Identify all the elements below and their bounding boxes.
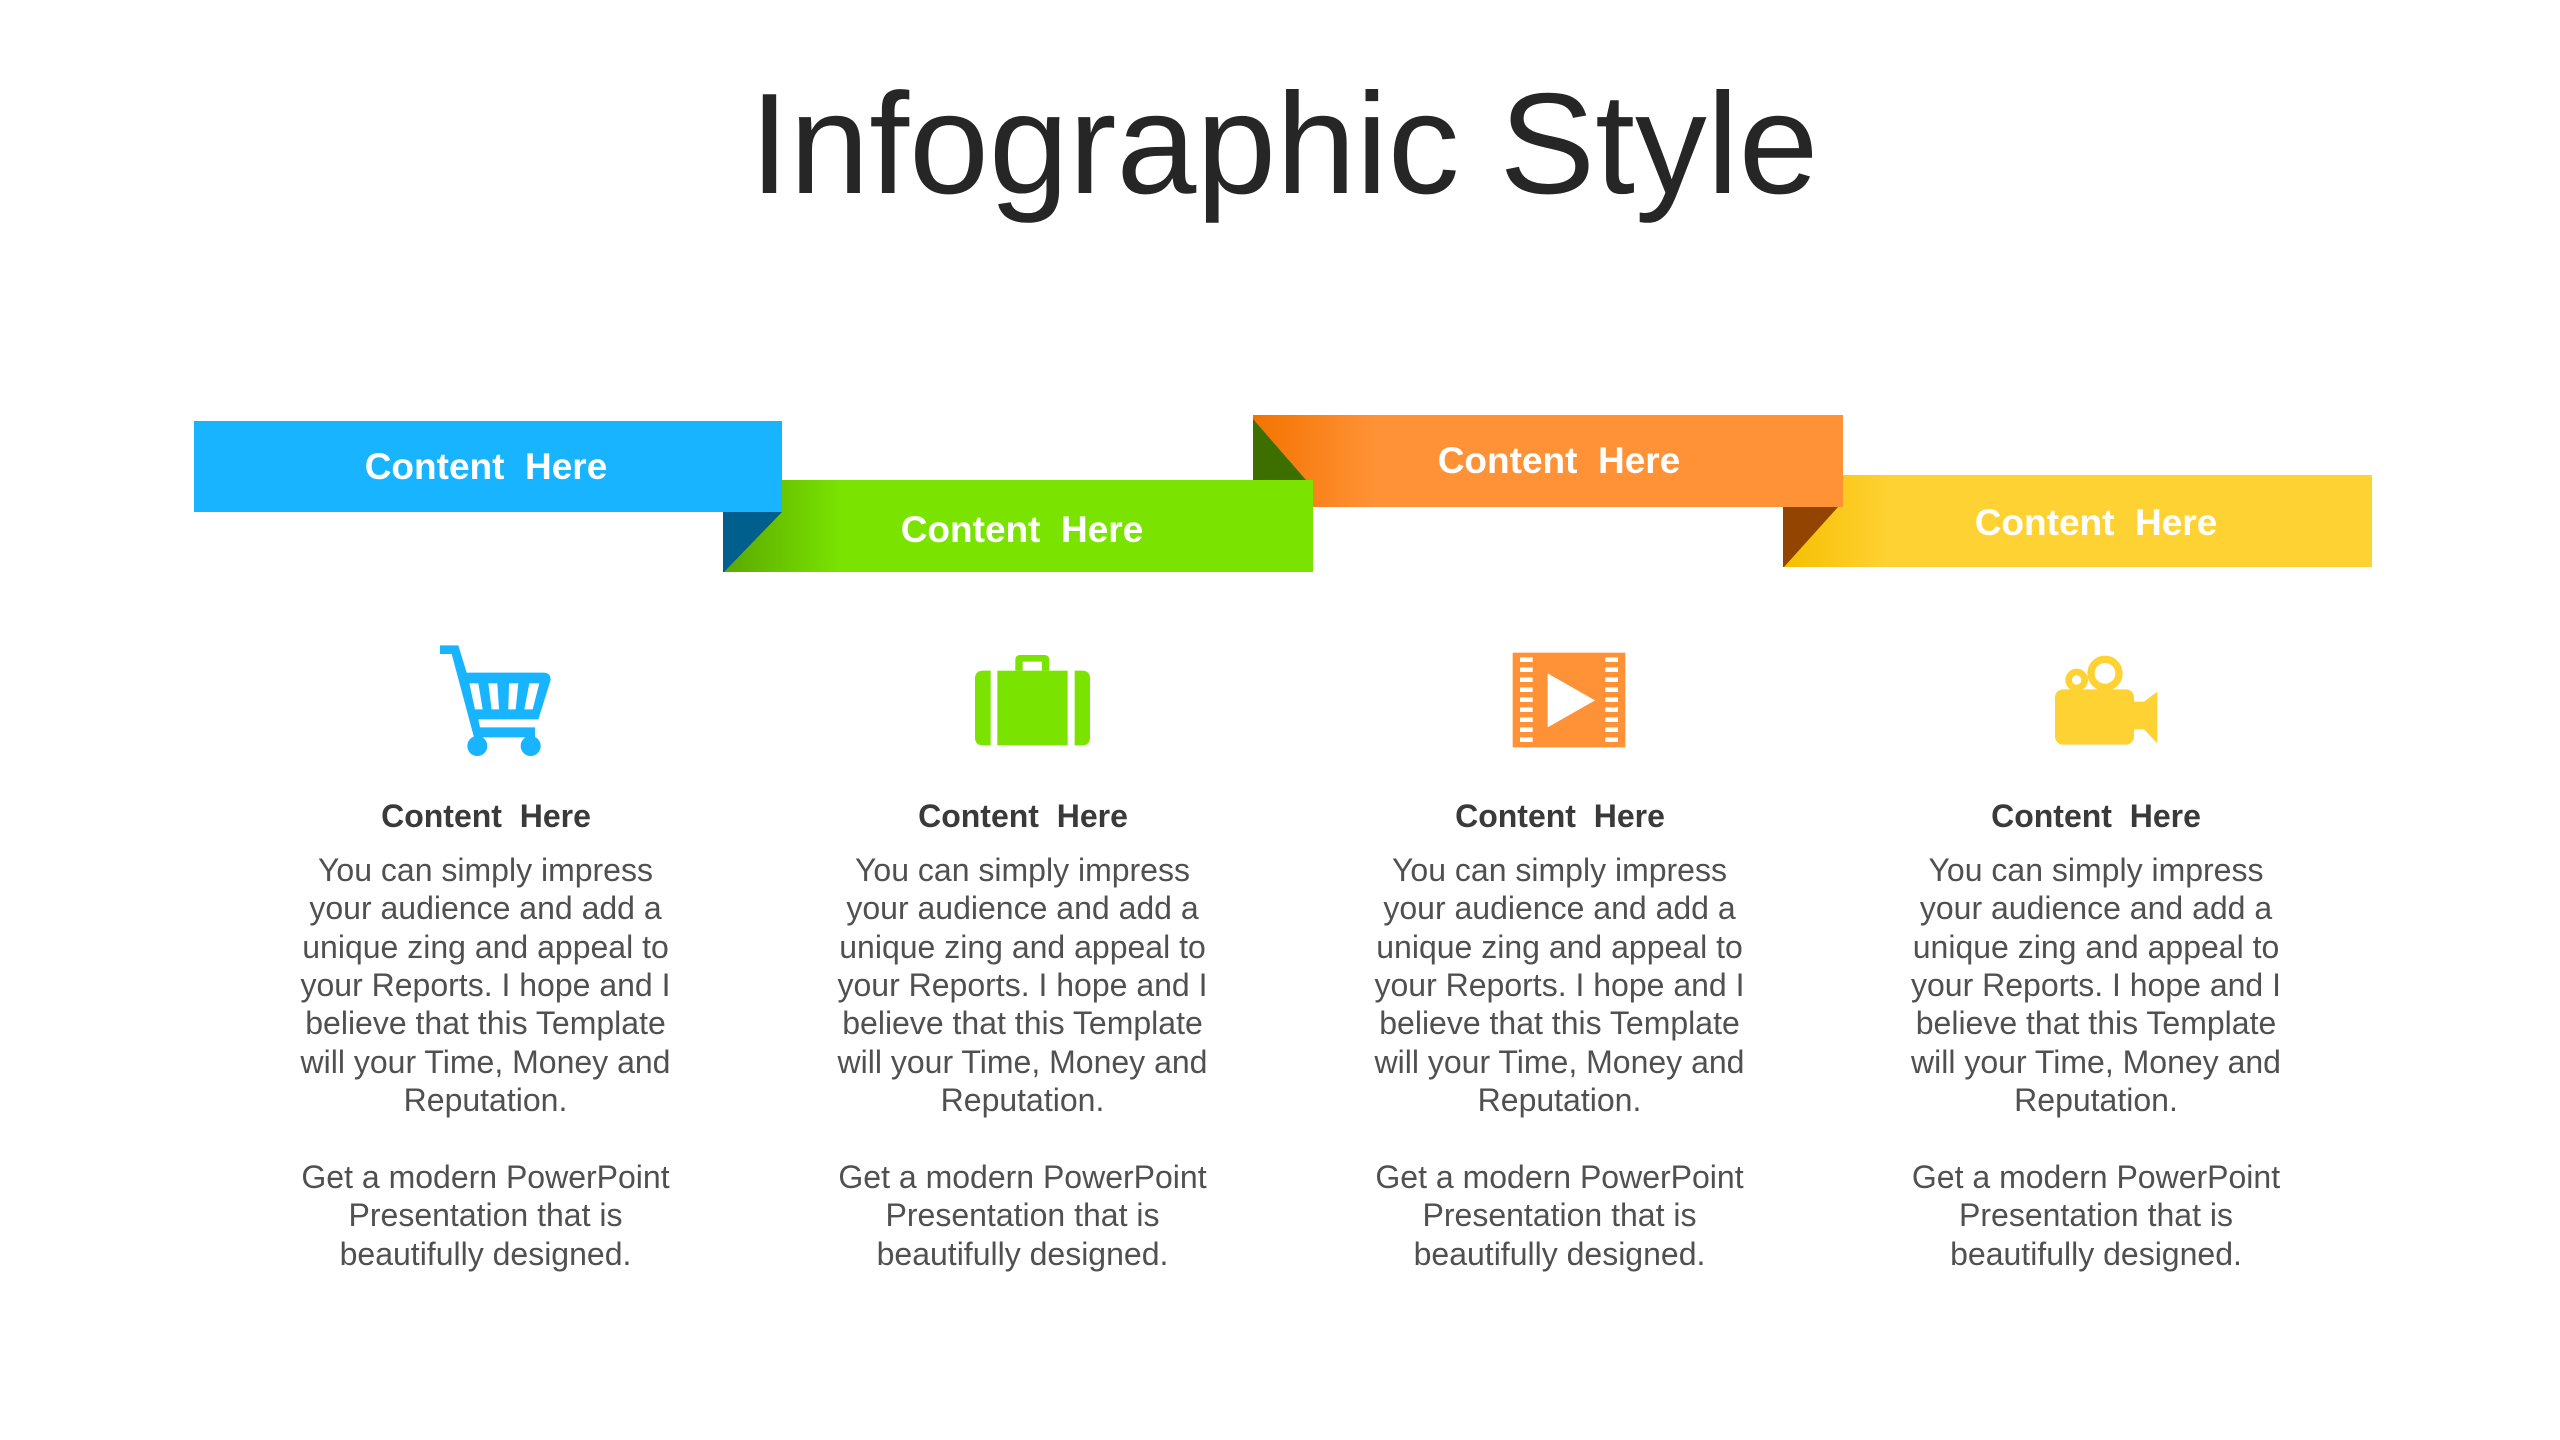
- column 1 body: your Reports. I hope and I: [300, 967, 670, 1003]
- column 4 body: Presentation that is: [1959, 1197, 2233, 1233]
- column 1 body: unique zing and appeal to: [302, 929, 669, 965]
- column 2 body: unique zing and appeal to: [839, 929, 1206, 965]
- column 4 body: your audience and add a: [1920, 890, 2272, 926]
- fold: dark blue: [723, 512, 785, 572]
- column 1 body: Get a modern PowerPoint: [301, 1159, 670, 1195]
- fold: dark green: [1253, 418, 1308, 481]
- ribbon 3: orange: [1253, 415, 1843, 507]
- ribbon label 3: Content Here: [1438, 440, 1680, 481]
- ribbon label 4: Content Here: [1975, 502, 2217, 543]
- column 4 heading: Content Here: [1991, 798, 2201, 834]
- ribbon 2: green: [723, 480, 1313, 572]
- column 4 body: Reputation.: [2014, 1082, 2178, 1118]
- column 3 body: You can simply impress: [1392, 852, 1727, 888]
- column 4 body: your Reports. I hope and I: [1911, 967, 2281, 1003]
- column 2 text: [837, 798, 1208, 1272]
- fold: brown: [1783, 507, 1840, 567]
- column 1 heading: Content Here: [381, 798, 591, 834]
- column 3 text: [1374, 798, 1744, 1272]
- column 1 body: Presentation that is: [349, 1197, 622, 1233]
- icon: briefcase: [975, 655, 1090, 745]
- column 3 body: Reputation.: [1478, 1082, 1641, 1118]
- green band: [724, 480, 1313, 572]
- yellow band: [1784, 475, 2372, 567]
- column 2 body: Presentation that is: [886, 1197, 1159, 1233]
- column 2 body: believe that this Template: [842, 1005, 1203, 1041]
- blue band: [194, 421, 782, 512]
- column 4 text: [1910, 798, 2281, 1272]
- column 4 body: beautifully designed.: [1950, 1236, 2242, 1272]
- column 2 body: Reputation.: [941, 1082, 1104, 1118]
- title: Infographic Style: [750, 64, 1818, 224]
- column 2 body: your Reports. I hope and I: [838, 967, 1208, 1003]
- column 2 body: Get a modern PowerPoint: [838, 1159, 1207, 1195]
- column 2 body: beautifully designed.: [877, 1236, 1168, 1272]
- column 3 body: beautifully designed.: [1414, 1236, 1705, 1272]
- column 1 body: You can simply impress: [318, 852, 653, 888]
- column 1 body: believe that this Template: [305, 1005, 666, 1041]
- column 2 body: You can simply impress: [855, 852, 1190, 888]
- column 1 body: beautifully designed.: [340, 1236, 631, 1272]
- column 3 body: will your Time, Money and: [1374, 1044, 1744, 1080]
- ribbon 1: blue: [194, 421, 782, 512]
- column 2 body: will your Time, Money and: [837, 1044, 1207, 1080]
- icon: video camera: [2055, 659, 2157, 745]
- column 1 body: [300, 852, 670, 1272]
- column 3 body: your Reports. I hope and I: [1374, 967, 1744, 1003]
- ribbon label 2: Content Here: [901, 509, 1143, 550]
- column 1 text: [300, 798, 670, 1272]
- column 2 body: [837, 852, 1208, 1272]
- ribbon label 1: Content Here: [365, 446, 607, 487]
- column 3 body: Get a modern PowerPoint: [1375, 1159, 1744, 1195]
- column 3 body: unique zing and appeal to: [1376, 929, 1743, 965]
- icon: shopping cart: [440, 645, 551, 756]
- column 4 body: [1910, 852, 2281, 1272]
- column 1 body: your audience and add a: [309, 890, 662, 926]
- column 4 body: Get a modern PowerPoint: [1912, 1159, 2280, 1195]
- column 3 body: [1374, 852, 1744, 1272]
- ribbon 4: yellow: [1783, 475, 2372, 567]
- column 3 body: believe that this Template: [1379, 1005, 1740, 1041]
- column 1 body: Reputation.: [404, 1082, 567, 1118]
- column 1 body: will your Time, Money and: [300, 1044, 670, 1080]
- column 4 body: unique zing and appeal to: [1913, 929, 2279, 965]
- column 2 body: your audience and add a: [846, 890, 1199, 926]
- column 4 body: You can simply impress: [1929, 852, 2263, 888]
- column 4 body: believe that this Template: [1916, 1005, 2276, 1041]
- column 2 heading: Content Here: [918, 798, 1128, 834]
- column 3 body: Presentation that is: [1423, 1197, 1696, 1233]
- orange band: [1253, 415, 1843, 507]
- column 3 body: your audience and add a: [1383, 890, 1736, 926]
- icon: film with play button: [1513, 653, 1625, 747]
- column 3 heading: Content Here: [1455, 798, 1665, 834]
- column 4 body: will your Time, Money and: [1910, 1044, 2281, 1080]
